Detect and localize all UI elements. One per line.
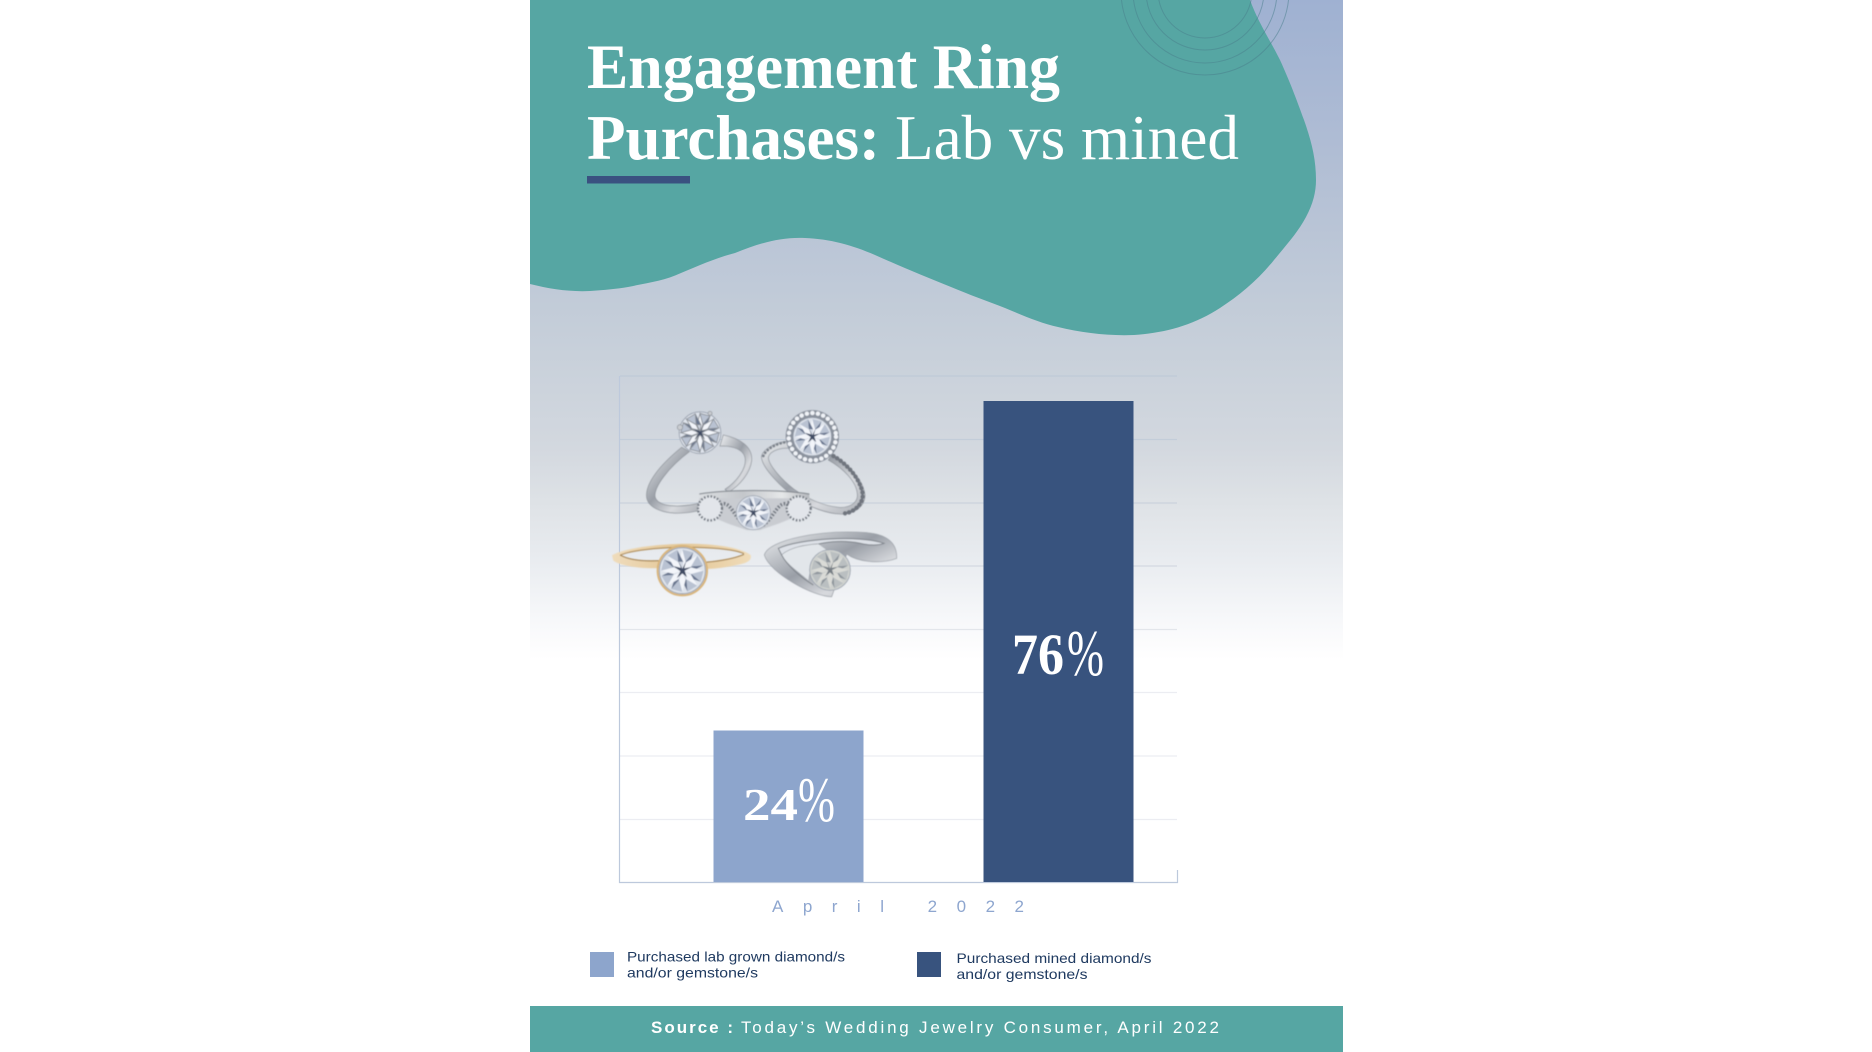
legend: lab grown: and/or gemstone/s [627,964,758,980]
footer bar [530,1006,1343,1052]
title line 2 regular: Lab vs mined [895,102,1239,173]
ring: gold bezel [612,544,751,595]
teal header blob [530,0,1316,335]
legend: mined [917,950,1152,982]
x axis label: April 2022 [772,897,1024,916]
axes [620,376,1178,882]
bar: lab grown 24% [714,730,864,882]
legend: mined: and/or gemstone/s [956,966,1088,982]
ring: three stone [698,490,811,530]
bar: lab grown 24%: % [798,764,835,835]
bar: mined 76% [984,401,1134,882]
title line 1: Engagement Ring [587,31,1060,102]
legend: lab grown [590,948,845,980]
concentric circles decoration [1121,0,1289,75]
title line 2 bold: Purchases: [587,102,880,173]
ring: white gold bypass [764,532,897,597]
title underline [587,176,690,184]
ring illustration [612,410,897,597]
legend [590,948,1152,982]
bar: mined 76%: % [1067,617,1104,690]
title [587,31,1239,173]
background panel [530,0,1343,660]
ring: solitaire [647,411,752,513]
bar: lab grown 24%: 24 [743,779,798,830]
bar: mined 76%: 76 [1012,622,1064,687]
gridlines [620,376,1177,820]
source label: Source : [651,1018,733,1037]
chart [620,376,1178,916]
legend: mined: Purchased mined diamond/s [956,950,1152,966]
legend: lab grown: Purchased lab grown diamond/s [627,948,845,964]
ring: halo pave [762,410,865,514]
source text: Today’s Wedding Jewelry Consumer, April 2022 [741,1018,1219,1037]
